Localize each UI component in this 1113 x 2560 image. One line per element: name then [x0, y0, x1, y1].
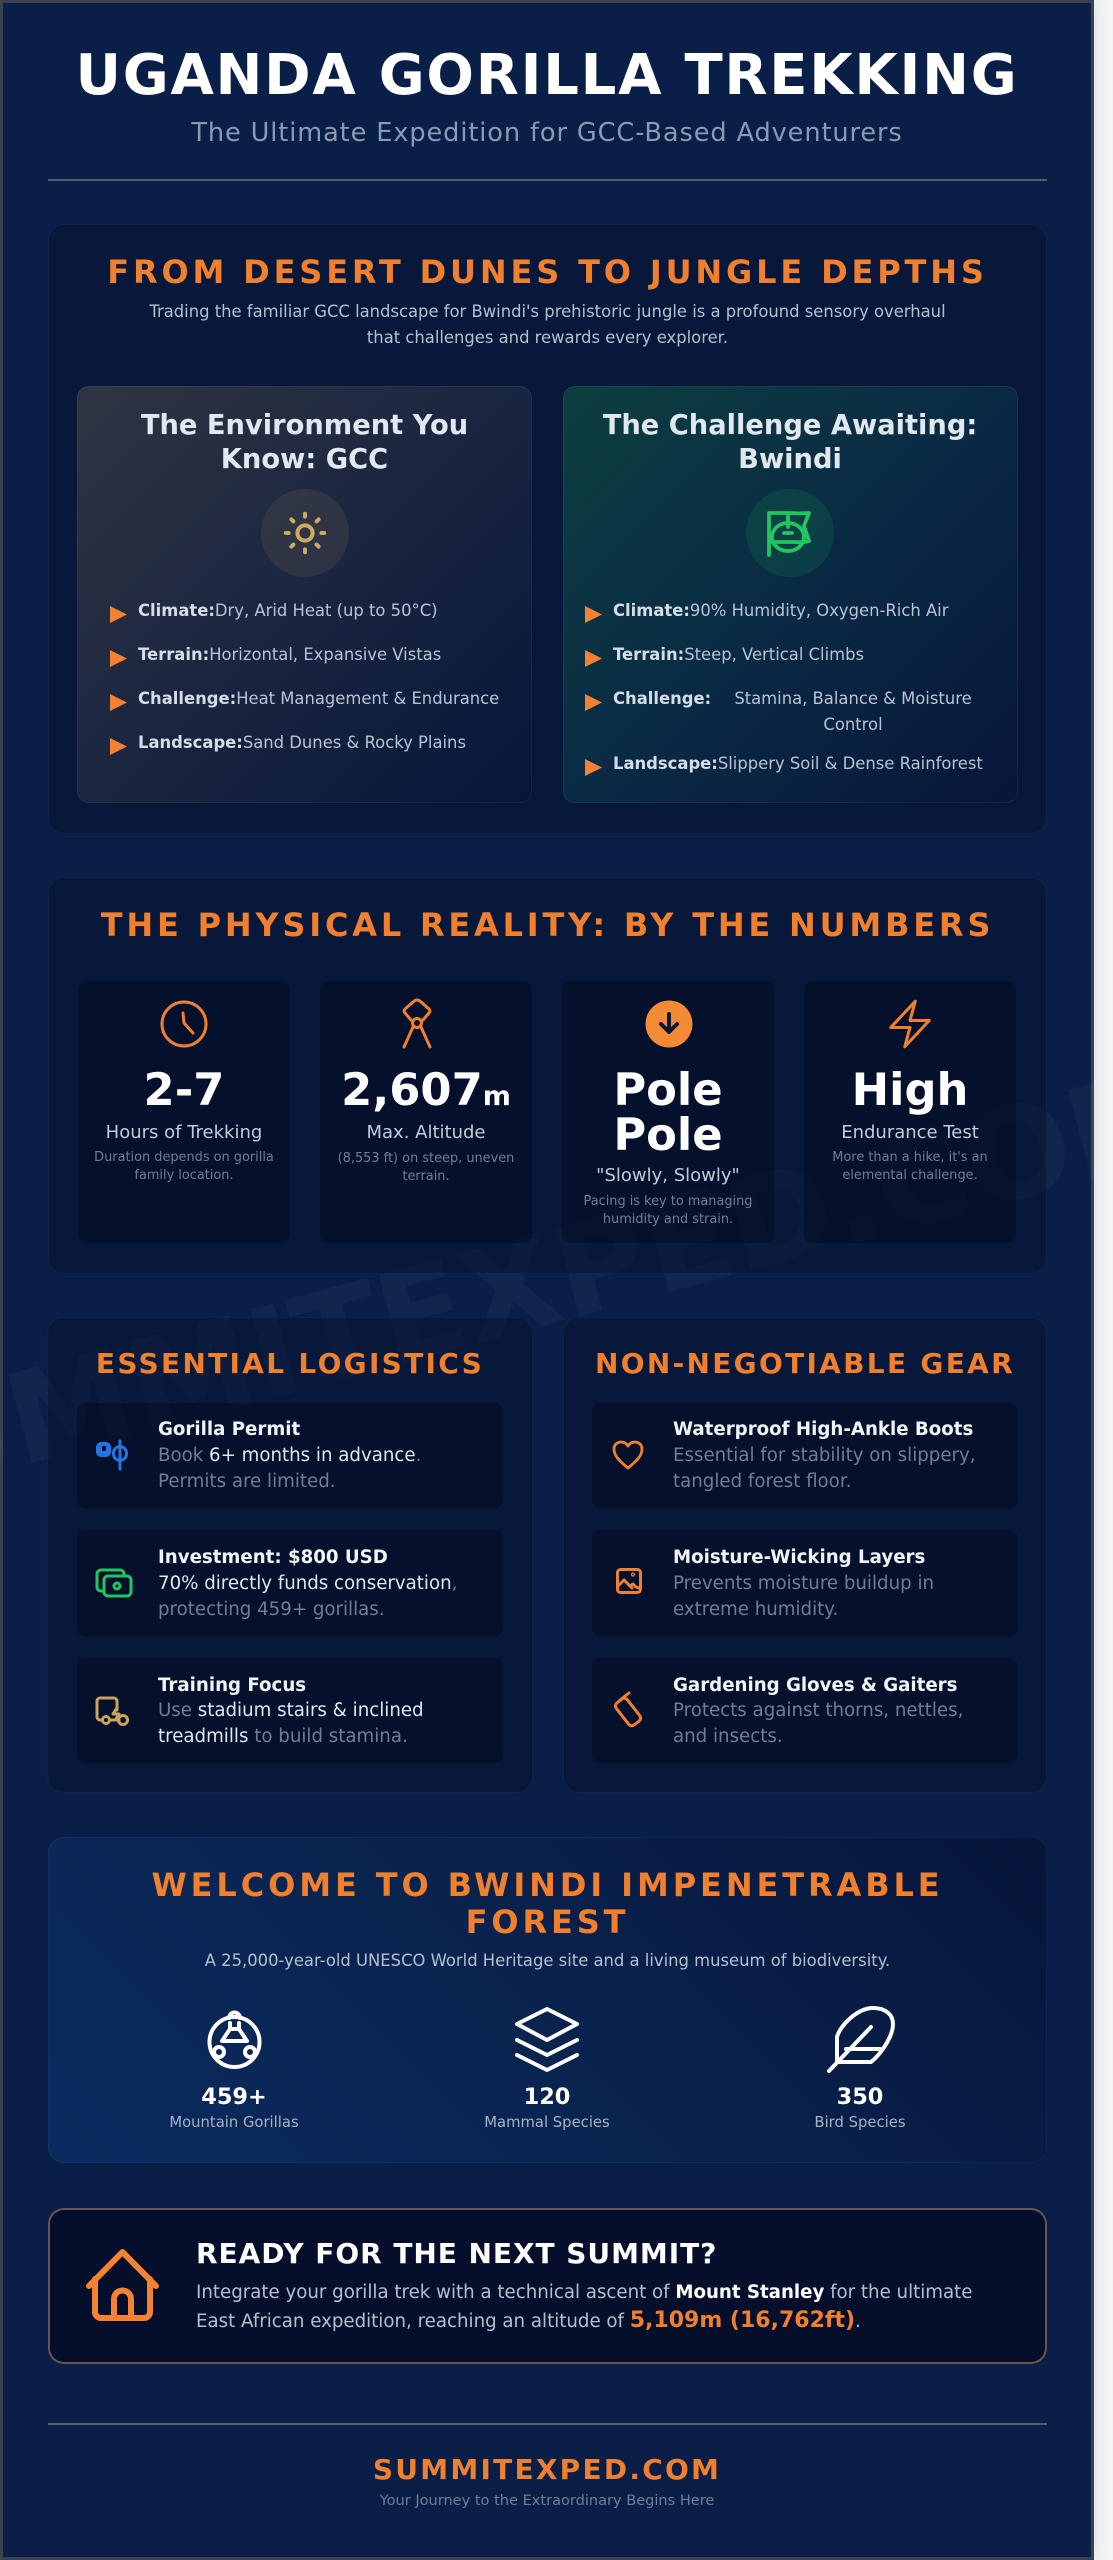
stat: mammals: 120: [524, 2084, 570, 2110]
card heading: The Challenge Awaiting:: [603, 410, 977, 441]
item: boots: [592, 1403, 1018, 1508]
item: gorilla permit: Permits are limited.: [158, 1471, 336, 1492]
icon: glove: [614, 1691, 642, 1728]
heading: logistics: ESSENTIAL LOGISTICS: [96, 1347, 484, 1380]
panel: from desert dunes to jungle depths: [48, 224, 1047, 834]
stat: birds: 350: [837, 2084, 883, 2110]
stat: pole pole: Pacing is key to managing: [584, 1194, 752, 1209]
icon: layers: [514, 2007, 580, 2072]
heading: physical reality: THE PHYSICAL REALITY: BY THE NUMBERS: [101, 906, 994, 944]
heading: gear: NON-NEGOTIABLE GEAR: [595, 1347, 1015, 1380]
stat: hours of trekking: Duration depends on gorilla: [94, 1150, 274, 1165]
header subtitle: The Ultimate Expedition for GCC-Based Adventurers: [191, 118, 903, 148]
icon: jungle flag: [746, 489, 834, 577]
list: Bwindi facts: Climate:90% Humidity, Oxygen-Rich Air: [613, 601, 948, 620]
item: layers: Prevents moisture buildup in: [673, 1573, 934, 1594]
card: Bwindi challenge: [562, 386, 1018, 803]
item: gloves: and insects.: [673, 1726, 783, 1747]
stat: hours of trekking: [78, 981, 290, 1243]
panel: non-negotiable gear: [563, 1317, 1047, 1793]
callout text: East African expedition, reaching an altitude of 5,109m (16,762ft).: [196, 2308, 861, 2333]
item: boots: Waterproof High-Ankle Boots: [673, 1419, 973, 1440]
list: Bwindi facts: Challenge:: [613, 689, 711, 708]
icon: arrow down circle: [646, 1000, 692, 1048]
stat: birds: [814, 2006, 906, 2131]
stat: gorillas: [169, 2010, 299, 2131]
icon: image: [616, 1568, 642, 1594]
list: Bwindi facts: Control: [823, 715, 883, 734]
item: gorilla permit: Gorilla Permit: [158, 1419, 300, 1440]
panel: essential logistics: [47, 1317, 533, 1793]
stat: pole pole: Pole: [613, 1063, 723, 1116]
card heading: The Environment You: [141, 410, 468, 441]
stat: birds: Bird Species: [814, 2114, 906, 2131]
heading: Bwindi: FOREST: [466, 1902, 629, 1940]
icon: feather: [826, 2006, 895, 2074]
stat: pole pole: "Slowly, Slowly": [596, 1165, 740, 1186]
icon: house: [86, 2249, 159, 2321]
list: Bwindi facts: Stamina, Balance & Moisture: [734, 689, 972, 708]
card heading: Know: GCC: [221, 444, 388, 474]
stat: pole pole: humidity and strain.: [603, 1212, 733, 1227]
stat: pole pole: [562, 981, 774, 1243]
heading: Bwindi: [151, 1866, 944, 1940]
footer brand: SUMMITEXPED.COM: [373, 2453, 721, 2486]
item: investment: [77, 1530, 503, 1636]
callout text: [196, 2282, 972, 2333]
icon: training: [96, 1696, 129, 1726]
stat: gorillas: 459+: [201, 2084, 267, 2110]
item: training focus: Training Focus: [158, 1675, 306, 1696]
stat: hours of trekking: family location.: [134, 1168, 234, 1183]
intro text: [149, 302, 946, 347]
item: layers: [592, 1530, 1018, 1636]
stat: endurance: Endurance Test: [841, 1122, 979, 1143]
list: Bwindi facts: [585, 601, 983, 776]
icon: permit: [96, 1440, 128, 1470]
item: investment: protecting 459+ gorillas.: [158, 1599, 385, 1620]
callout heading: READY FOR THE NEXT SUMMIT?: [196, 2237, 717, 2270]
list: Bwindi facts: Landscape:Slippery Soil & Dense Rainforest: [613, 754, 983, 773]
card heading: [141, 410, 468, 474]
intro text: Trading the familiar GCC landscape for Bwindi's prehistoric jungle is a profound sensory overhaul: [149, 302, 946, 321]
card heading: Bwindi: [738, 444, 842, 474]
stat: endurance: [804, 981, 1016, 1243]
item: gloves: Protects against thorns, nettles,: [673, 1700, 963, 1721]
list: GCC facts: Terrain:Horizontal, Expansive Vistas: [138, 645, 441, 664]
callout text: Integrate your gorilla trek with a technical ascent of Mount Stanley for the ultimate: [196, 2282, 972, 2303]
panel: Bwindi biodiversity: [48, 1837, 1047, 2163]
stat: max altitude: terrain.: [402, 1169, 450, 1184]
icon: gorilla emblem: [208, 2010, 262, 2069]
item: boots: Essential for stability on slippery,: [673, 1445, 976, 1466]
heading: Bwindi: WELCOME TO BWINDI IMPENETRABLE: [151, 1866, 944, 1904]
item: boots: tangled forest floor.: [673, 1471, 851, 1492]
footer tagline: Your Journey to the Extraordinary Begins Here: [380, 2492, 714, 2509]
callout: next summit: [48, 2208, 1047, 2364]
item: layers: extreme humidity.: [673, 1599, 838, 1620]
item: investment: Investment: $800 USD: [158, 1547, 388, 1568]
stat: max altitude: [320, 981, 532, 1243]
intro text: A 25,000-year-old UNESCO World Heritage site and a living museum of biodiversity.: [205, 1951, 890, 1970]
stat: hours of trekking: 2-7: [144, 1063, 224, 1116]
icon: heart: [612, 1440, 644, 1470]
stat: endurance: elemental challenge.: [842, 1168, 978, 1183]
item: training focus: [77, 1658, 503, 1763]
header title: UGANDA GORILLA TREKKING: [76, 43, 1018, 108]
icon: compass: [402, 998, 432, 1048]
stat: max altitude: Max. Altitude: [366, 1122, 486, 1143]
item: gorilla permit: Book 6+ months in advance.: [158, 1445, 421, 1466]
card heading: [602, 410, 977, 474]
list: GCC facts: Challenge:Heat Management & Endurance: [138, 689, 499, 708]
icon: money: [96, 1568, 132, 1598]
stat: endurance: High: [852, 1063, 968, 1116]
list: GCC facts: Landscape:Sand Dunes & Rocky Plains: [138, 733, 466, 752]
intro text: that challenges and rewards every explorer.: [367, 328, 728, 347]
stat: endurance: More than a hike, it's an: [832, 1150, 988, 1165]
heading: comparison: FROM DESERT DUNES TO JUNGLE DEPTHS: [107, 253, 988, 291]
icon: clock: [160, 1000, 208, 1048]
stat: hours of trekking: Hours of Trekking: [106, 1122, 262, 1143]
list: Bwindi facts: Terrain:Steep, Vertical Climbs: [613, 645, 864, 664]
item: gloves: [592, 1658, 1018, 1763]
panel: by the numbers: [48, 877, 1047, 1274]
stat: mammals: Mammal Species: [484, 2114, 610, 2131]
icon: lightning bolt: [889, 1000, 931, 1048]
item: gloves: Gardening Gloves & Gaiters: [673, 1675, 957, 1696]
item: gorilla permit: [77, 1403, 503, 1508]
stat: max altitude: 2,607m: [341, 1063, 511, 1116]
card: GCC environment: [77, 386, 532, 803]
stat: max altitude: (8,553 ft) on steep, uneven: [338, 1151, 514, 1166]
item: training focus: Use stadium stairs & inclined: [158, 1700, 424, 1721]
item: investment: 70% directly funds conservation,: [158, 1573, 457, 1594]
item: training focus: treadmills to build stamina.: [158, 1726, 408, 1747]
list: GCC facts: Climate:Dry, Arid Heat (up to 50°C): [138, 601, 438, 620]
icon: sun: [260, 489, 348, 577]
item: layers: Moisture-Wicking Layers: [673, 1547, 925, 1568]
list: GCC facts: [110, 601, 499, 755]
stat: gorillas: Mountain Gorillas: [169, 2114, 299, 2131]
stat: pole pole: Pole: [613, 1108, 723, 1161]
stat: mammals: [484, 2007, 610, 2131]
